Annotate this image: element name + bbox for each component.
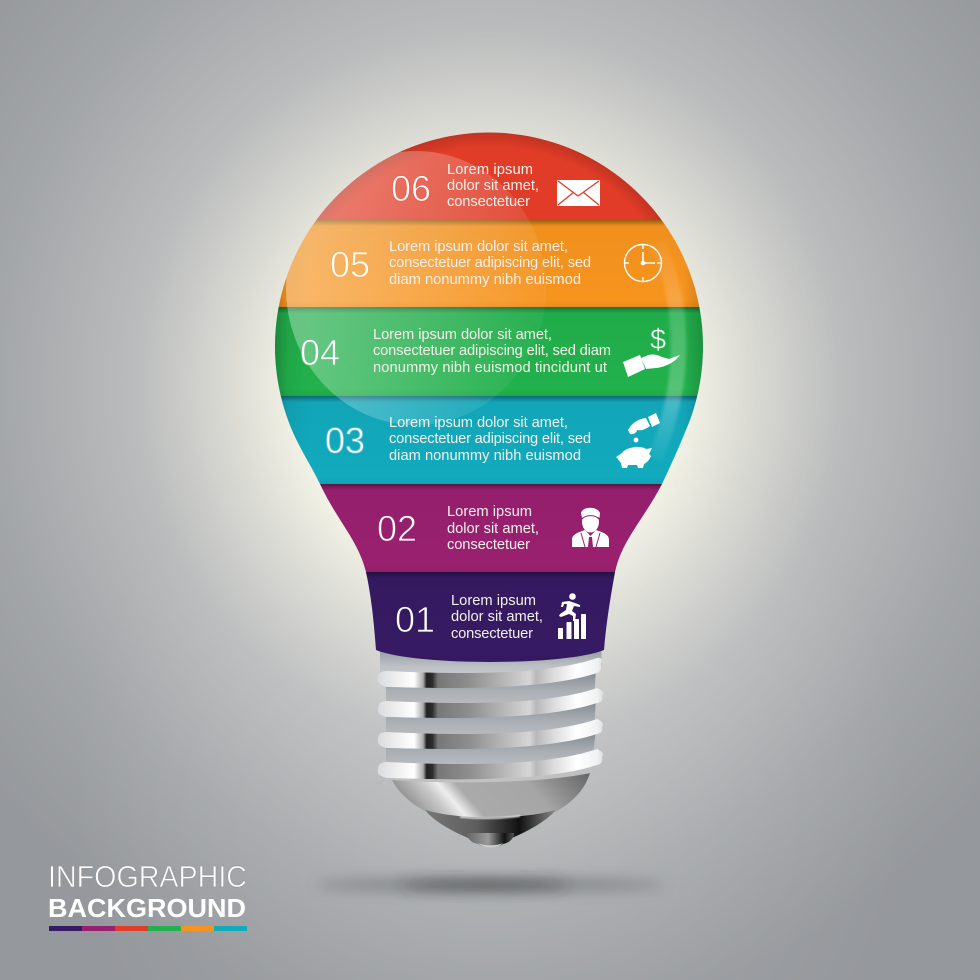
text 03: Lorem ipsum dolor sit amet, — [389, 415, 568, 431]
text 01: Lorem ipsum — [451, 593, 536, 609]
text 01: dolor sit amet, — [451, 609, 543, 625]
text 05: Lorem ipsum dolor sit amet, — [389, 239, 568, 255]
icon: envelope — [557, 180, 600, 206]
band 05 orange — [260, 220, 720, 307]
text 02: Lorem ipsum — [447, 504, 532, 520]
band 04 content — [300, 324, 680, 377]
rim shading — [275, 268, 703, 422]
contact collar — [425, 810, 556, 838]
number 05: 05 — [330, 244, 370, 285]
band 02 magenta — [320, 484, 662, 572]
top rim shade — [316, 132, 662, 220]
thread grooves — [386, 668, 596, 778]
icon: hand with dollar — [623, 324, 680, 377]
text 04: Lorem ipsum dolor sit amet, — [373, 327, 552, 343]
number 01: 01 — [395, 599, 435, 640]
text 01: consectetuer — [451, 626, 533, 642]
lamp screw base — [378, 645, 603, 848]
text 02: dolor sit amet, — [447, 521, 539, 537]
text 02: consectetuer — [447, 537, 530, 553]
text 03: diam nonummy nibh euismod — [389, 448, 581, 464]
text 04: nonummy nibh euismod tincidunt ut — [373, 360, 607, 376]
text 06 — [447, 162, 539, 210]
band 03 teal — [260, 396, 720, 484]
text 04: consectetuer adipiscing elit, sed diam — [373, 343, 611, 359]
ground shadow — [315, 879, 665, 891]
text 04 — [373, 327, 611, 376]
collar highlight — [460, 816, 520, 818]
tip highlight — [478, 843, 503, 848]
text 03 — [389, 415, 591, 464]
text 06: Lorem ipsum — [447, 162, 533, 178]
icon: clock — [624, 244, 662, 282]
text 02 — [447, 504, 539, 553]
band 01 indigo — [366, 572, 615, 662]
text 01 — [451, 593, 543, 642]
text 06: dolor sit amet, — [447, 178, 539, 194]
base cone — [392, 773, 590, 818]
text 05: consectetuer adipiscing elit, sed — [389, 255, 591, 271]
band 05 content — [330, 239, 662, 288]
band 03 content — [325, 413, 660, 468]
text 06: consectetuer — [447, 194, 530, 210]
title block — [48, 859, 247, 931]
band 06 content — [391, 162, 600, 210]
light bulb glass — [275, 132, 703, 662]
screw threads — [378, 658, 603, 779]
number 02: 02 — [377, 508, 417, 549]
colour strip — [49, 926, 247, 931]
contact tip — [467, 833, 514, 847]
icon: businessman — [572, 508, 609, 547]
icon: runner on bar chart — [558, 593, 586, 639]
band 01 content — [395, 593, 586, 642]
band 06 red — [316, 132, 662, 220]
right rim highlight — [648, 240, 686, 462]
number 04: 04 — [300, 332, 340, 373]
band shading — [278, 220, 700, 577]
number 03: 03 — [325, 420, 365, 461]
text 03: consectetuer adipiscing elit, sed — [389, 431, 591, 447]
icon: hand with dollar: $ — [650, 324, 666, 356]
number 06: 06 — [391, 168, 431, 209]
glass reflection — [286, 151, 546, 425]
band 02 content — [377, 504, 609, 553]
text 05 — [389, 239, 591, 288]
base neck — [380, 645, 602, 680]
title line: BACKGROUND: BACKGROUND — [48, 893, 246, 923]
text 05: diam nonummy nibh euismod — [389, 272, 581, 288]
band 04 green — [260, 307, 720, 396]
icon: coin into piggy bank — [616, 413, 660, 468]
title line: INFOGRAPHIC: INFOGRAPHIC — [48, 859, 247, 894]
